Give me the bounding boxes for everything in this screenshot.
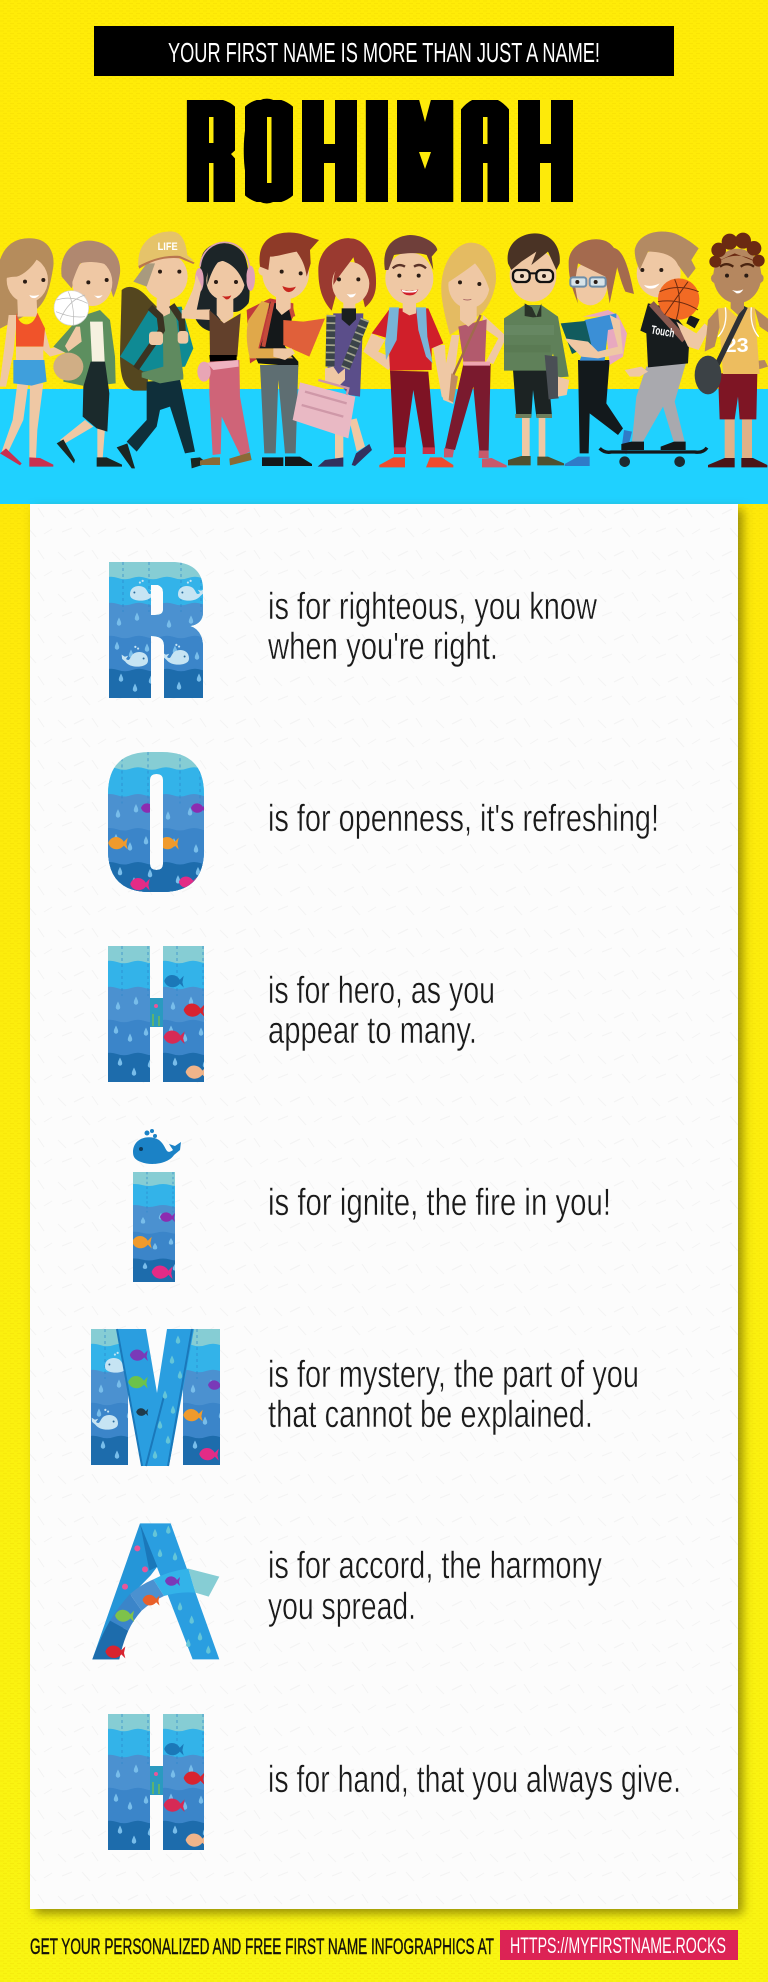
title: ROHIMAH: R: [182, 67, 235, 234]
person 7 with red shirt: [363, 235, 453, 467]
header banner: tagline: [94, 26, 674, 76]
white content panel: [30, 504, 738, 1909]
group of thirteen cartoon people: [0, 231, 768, 468]
row M: [86, 1329, 639, 1466]
letter I: [128, 1172, 243, 1282]
person 2 with volleyball: [53, 241, 122, 467]
row O: [103, 752, 659, 892]
row H second: [103, 1714, 681, 1850]
person 3 with backpack and cap: [117, 231, 207, 468]
text R: when you're right.: [267, 626, 498, 668]
text A: [268, 1545, 602, 1628]
text A: is for accord, the harmony: [268, 1545, 602, 1587]
person 4 with headphones: [182, 242, 255, 465]
icon: whale above letter I: [133, 1129, 181, 1164]
person 5 with book and backpack: [247, 233, 325, 466]
floor band: [0, 389, 768, 504]
person 1 with orange top: [0, 238, 80, 467]
text M: [268, 1354, 639, 1436]
text H: appear to many.: [268, 1010, 477, 1052]
footer: [30, 1930, 738, 1960]
letter A: [92, 1523, 219, 1659]
title: ROHIMAH: M: [392, 69, 459, 234]
letter M: [91, 1328, 220, 1466]
text H: [268, 970, 495, 1052]
title: ROHIMAH: H: [296, 69, 363, 234]
row A: [92, 1523, 602, 1659]
text H: is for hero, as you: [268, 970, 495, 1012]
person 11 on skateboard with basketball: Touch: [650, 322, 676, 340]
person 12 with curly hair and tank top: 23: [725, 334, 749, 357]
title: ROHIMAH: O: [241, 69, 293, 234]
person 8 blonde with bag: [441, 243, 507, 467]
letter H: [108, 1714, 204, 1850]
person 11 on skateboard with basketball: [600, 231, 710, 467]
person 3 with backpack and cap: LIFE: [158, 241, 178, 253]
letter R: [109, 562, 203, 698]
text R: is for righteous, you know: [268, 586, 597, 628]
text M: that cannot be explained.: [268, 1394, 593, 1436]
row R: [104, 562, 597, 698]
letter H: [108, 946, 204, 1082]
title: ROHIMAH: I: [356, 69, 397, 234]
person 10 with ponytail and tablet: [561, 239, 634, 466]
row H: [103, 946, 495, 1082]
row I: [128, 1129, 611, 1282]
text A: you spread.: [268, 1586, 416, 1628]
person 6 with striped sleeves and pink bag: [293, 238, 376, 467]
footer text: GET YOUR PERSONALIZED AND FREE FIRST NAME INFOGRAPHICS AT: [30, 1934, 494, 1959]
title: ROHIMAH: H: [512, 69, 579, 234]
text O: is for openness, it's refreshing!: [268, 798, 659, 840]
text R: [267, 586, 597, 668]
letter O: [108, 752, 204, 892]
person 12 with curly hair and tank top: [695, 233, 768, 467]
title: ROHIMAH: A: [461, 69, 509, 234]
text I: is for ignite, the fire in you!: [268, 1182, 611, 1224]
person 9 with glasses and green sweater: [504, 233, 569, 465]
title: ROHIMAH: [182, 67, 579, 234]
text M: is for mystery, the part of you: [268, 1354, 639, 1396]
